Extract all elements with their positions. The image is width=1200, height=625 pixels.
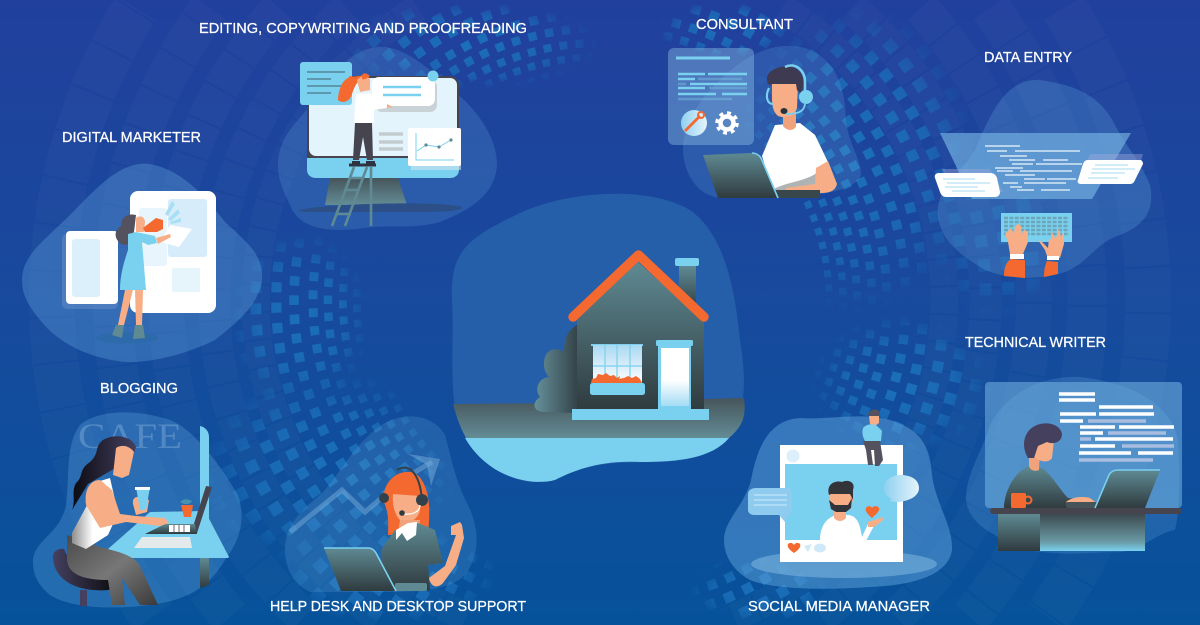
chimney: [675, 258, 699, 312]
scene: help desk and desktop support: [285, 416, 477, 592]
dot: [428, 70, 438, 82]
laptop: [1066, 470, 1160, 508]
laptop: [324, 548, 427, 591]
scene: social media manager: [724, 410, 952, 589]
cafe sign: CAFE: [78, 416, 182, 456]
man with headset: [762, 65, 837, 196]
window: [590, 344, 645, 395]
code screen: [940, 133, 1131, 199]
desk leg: [200, 558, 209, 588]
door: [656, 340, 693, 410]
mug: [1011, 493, 1032, 508]
label: digital marketer: DIGITAL MARKETER: [62, 129, 201, 146]
ladder: [332, 165, 376, 226]
blob: [724, 416, 952, 589]
left code card: [935, 169, 1003, 197]
label: blogging: BLOGGING: [100, 380, 178, 397]
woman with megaphone: [112, 215, 171, 339]
monitor stand: [325, 178, 407, 205]
label: technical writer: TECHNICAL WRITER: [965, 334, 1106, 351]
blob: [285, 416, 477, 592]
desk: [100, 511, 229, 558]
icon: gear: [717, 113, 737, 133]
right board: [130, 191, 216, 313]
roof: [573, 255, 704, 317]
scene: digital marketer: [22, 164, 262, 362]
megaphone rays: [165, 201, 181, 224]
paper: [160, 225, 192, 247]
code lines: [985, 146, 1082, 190]
house body: [577, 262, 704, 410]
desk: [990, 508, 1182, 551]
keyboard: [1001, 213, 1072, 242]
scene: blogging: [33, 412, 242, 608]
scene: technical writer: [966, 377, 1182, 553]
step: [572, 409, 709, 420]
label: editing: EDITING, COPYWRITING AND PROOFREADING: [199, 20, 527, 37]
woman at laptop: [67, 436, 169, 605]
bush: [535, 325, 577, 413]
blob: [683, 46, 861, 198]
window pillar: [200, 426, 209, 520]
right chat bubble: [884, 475, 919, 502]
blob: [966, 377, 1179, 553]
post icons: [788, 543, 826, 553]
scene: data entry: [935, 80, 1151, 278]
shadow: [96, 332, 158, 344]
woman on ladder: [338, 73, 393, 165]
blob: [33, 412, 242, 608]
chart card: [408, 128, 461, 170]
scene: editing, copywriting and proofreading: [278, 47, 497, 230]
icon: wrench: [681, 110, 707, 136]
laptop: [703, 153, 820, 198]
ground: [453, 398, 745, 438]
left chat bubble: [748, 488, 792, 522]
blob: house backdrop: [452, 194, 744, 482]
screen panel: [985, 382, 1182, 508]
central house scene: [452, 194, 745, 482]
label: help desk: HELP DESK AND DESKTOP SUPPORT: [270, 598, 526, 615]
stool: [53, 549, 115, 606]
laptop: [145, 486, 212, 534]
photo post: [780, 445, 903, 562]
text lines: [1059, 394, 1174, 460]
blob: [22, 164, 262, 362]
water: [465, 438, 729, 482]
white speech card: [372, 77, 437, 112]
platform shadow: [751, 550, 937, 578]
man in post: [820, 481, 884, 541]
label: consultant: CONSULTANT: [696, 16, 793, 33]
plant pot: [180, 499, 193, 517]
left board: [62, 231, 118, 309]
blob: [278, 47, 497, 230]
scene: consultant: [668, 46, 861, 198]
right code card: [1078, 154, 1143, 184]
blue note card: [300, 62, 352, 105]
writer: [1004, 423, 1098, 508]
small person sitting on post: [862, 410, 883, 466]
rising trend arrow: [290, 454, 440, 532]
woman with headset: [379, 468, 464, 590]
blob: [938, 80, 1151, 278]
label: social media manager: SOCIAL MEDIA MANAGER: [748, 598, 930, 615]
document panel: [668, 48, 754, 145]
monitor: [307, 76, 459, 178]
typing hands: [1004, 224, 1064, 278]
label: data entry: DATA ENTRY: [984, 49, 1072, 66]
grey text lines: [379, 134, 403, 149]
stand shadow: [298, 203, 462, 212]
